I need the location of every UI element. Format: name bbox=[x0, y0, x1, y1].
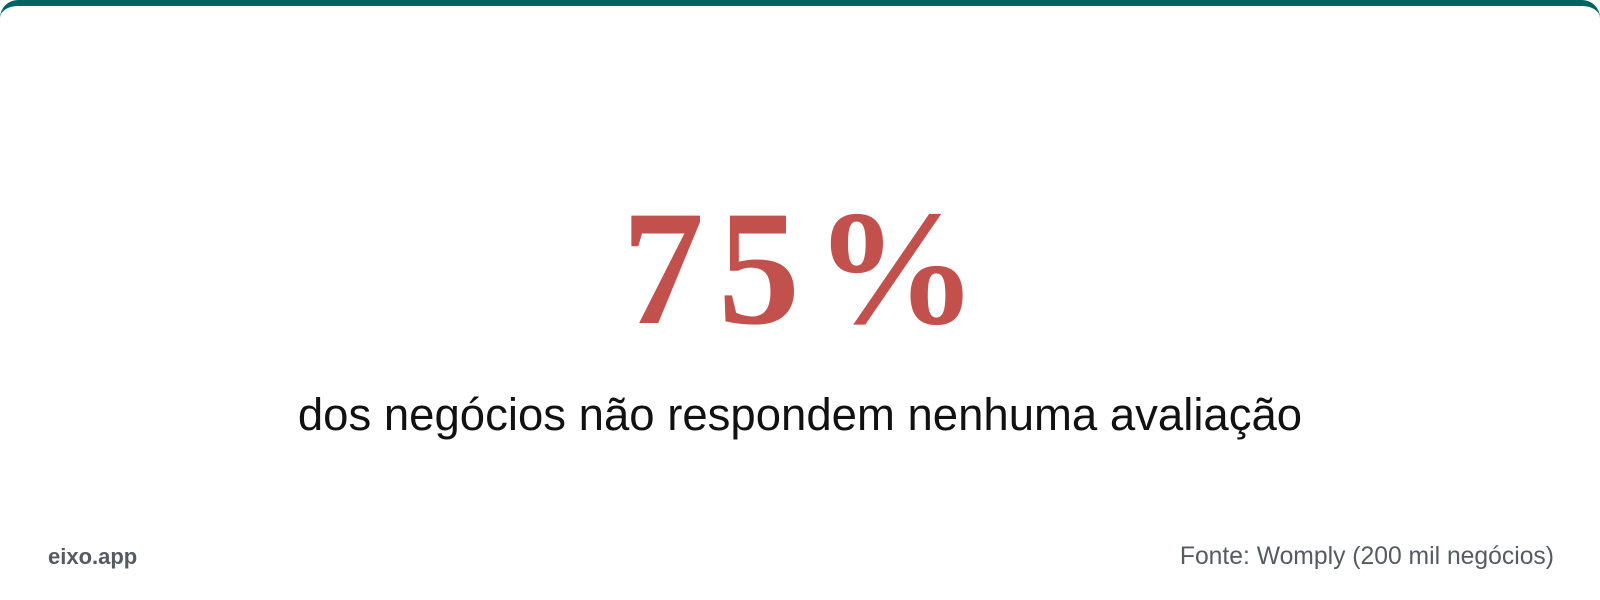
brand: eixo.app bbox=[48, 544, 137, 569]
source: Fonte: Womply (200 mil negócios) bbox=[1180, 543, 1554, 570]
subtitle: dos negócios não respondem nenhuma avaliação bbox=[298, 389, 1302, 440]
big number: 75% bbox=[622, 178, 992, 359]
